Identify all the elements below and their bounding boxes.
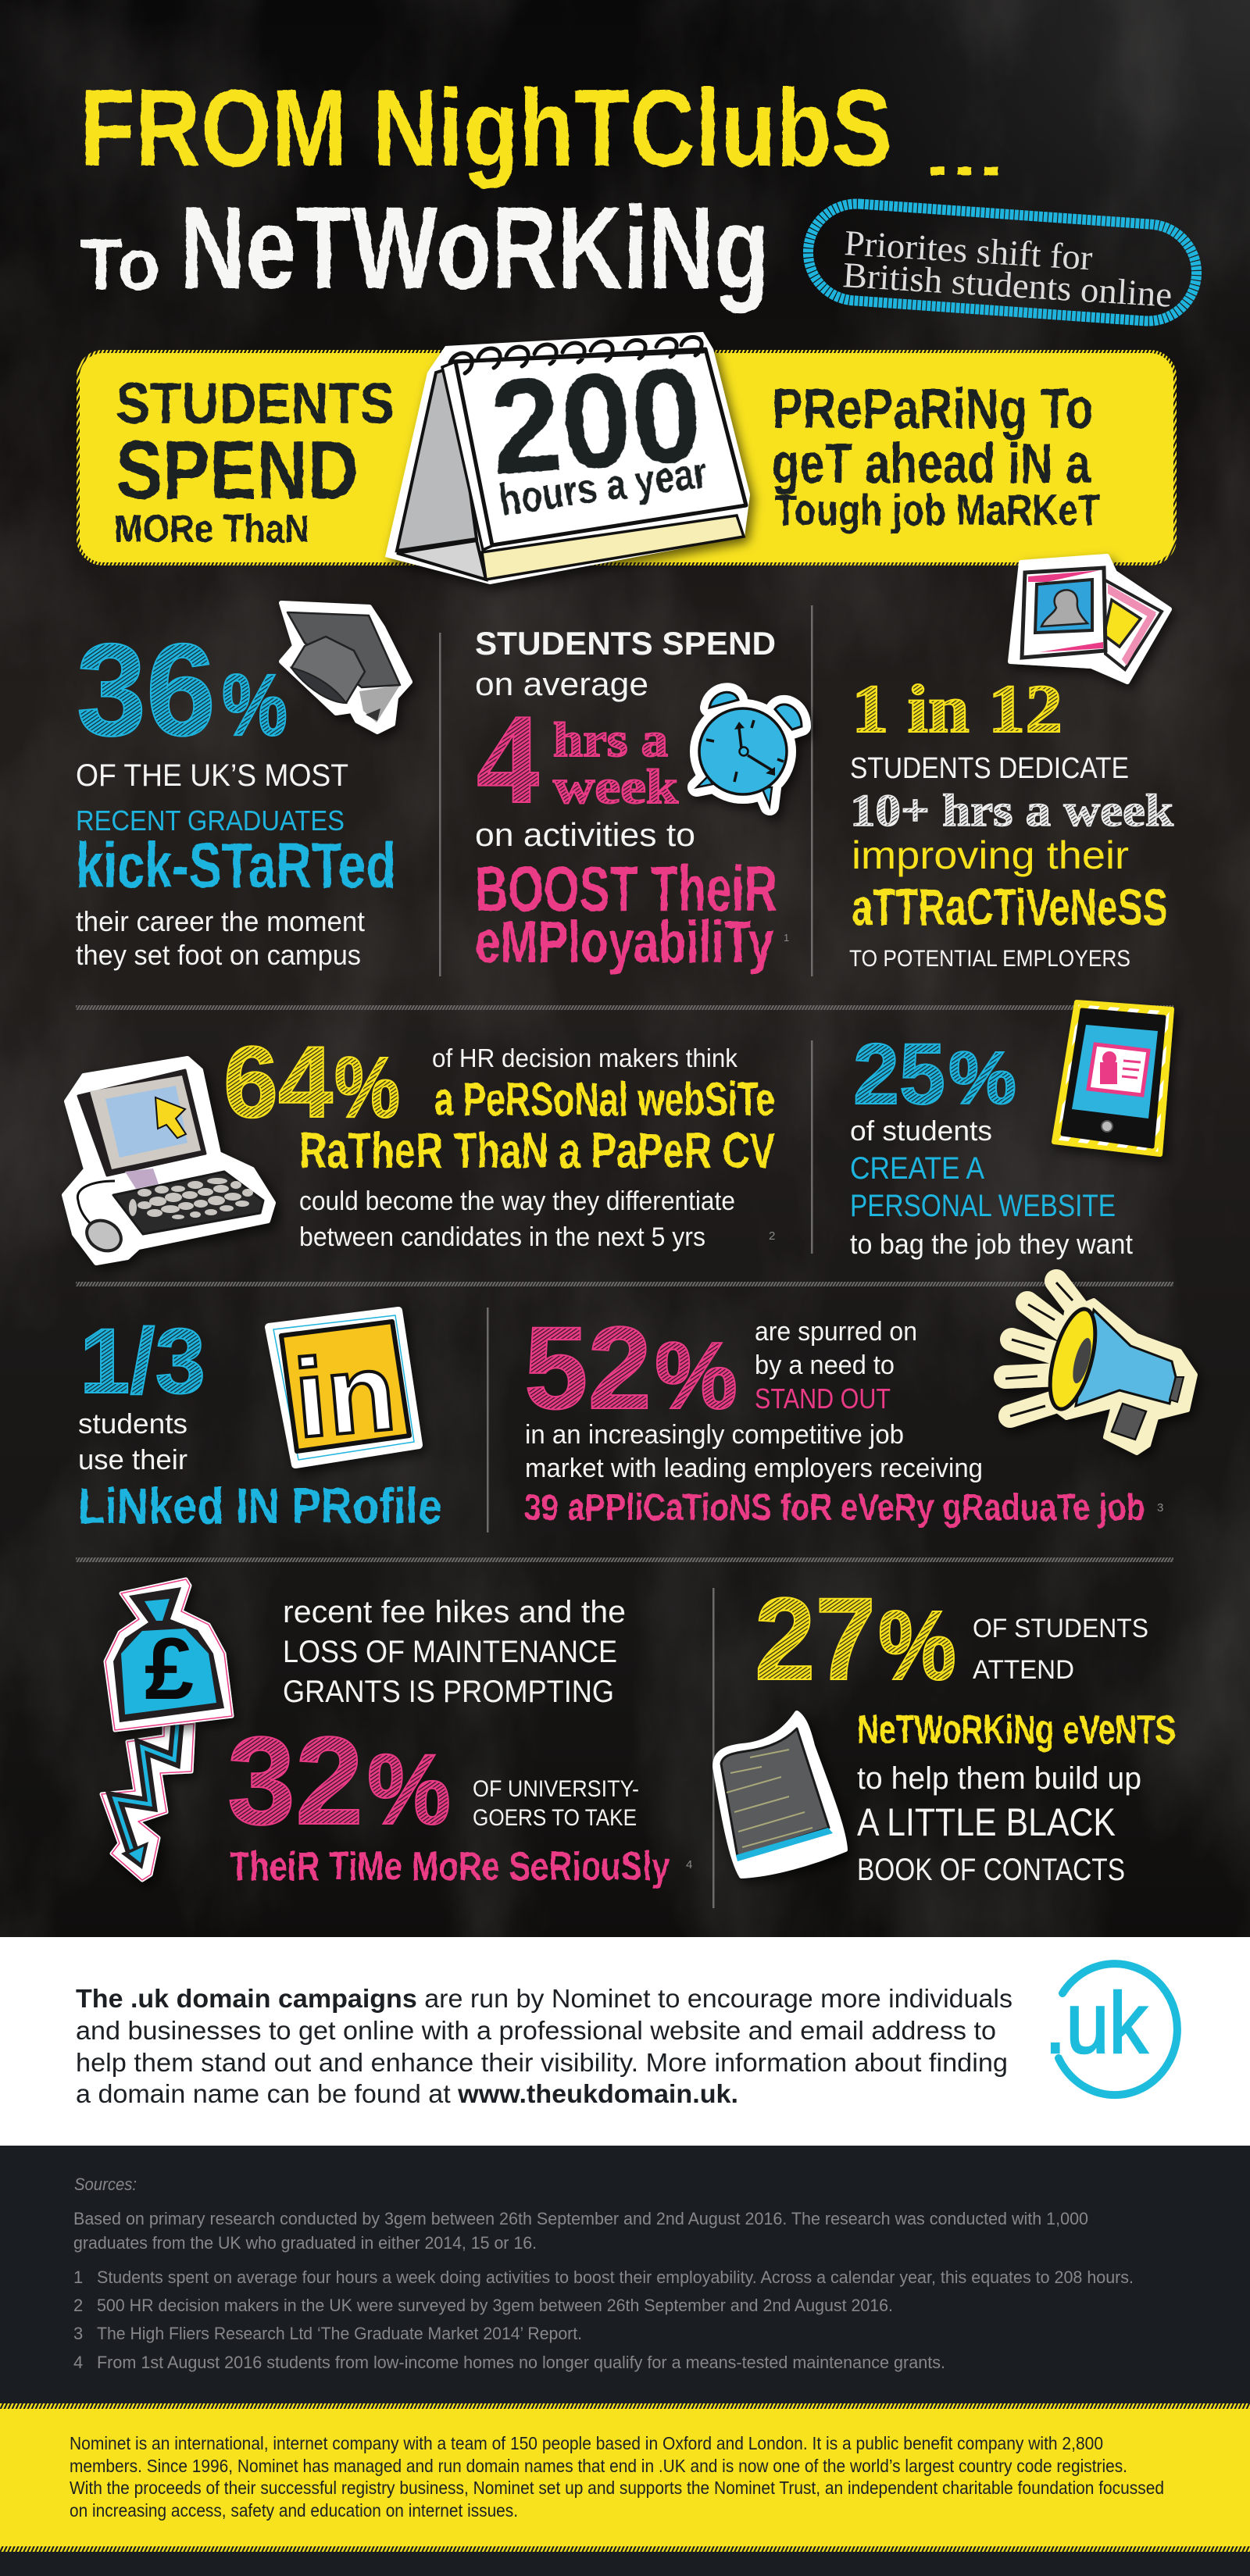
stat: 52 percent: 52	[524, 1302, 652, 1433]
chalkboard background	[0, 0, 1250, 1939]
stat: 36 percent: %	[222, 656, 288, 754]
stat: 36 percent: their career the moment	[76, 905, 365, 937]
title: ...	[924, 126, 1005, 187]
stat: 4 hrs a week: eMPloyabiliTy	[475, 909, 773, 976]
stat: 64 percent: could become the way they differentiate	[299, 1186, 735, 1216]
stat: 32 percent fee hikes: recent fee hikes and the	[283, 1595, 626, 1629]
icon: linkedin badge: in	[290, 1329, 400, 1461]
callout: priorities shift	[805, 201, 1200, 324]
stat: 4 hrs a week: hrs a	[553, 714, 668, 767]
panel: students spend 200 hours: MORe ThaN	[114, 507, 309, 551]
stat: 1 in 12	[849, 672, 1174, 972]
panel: sources: graduates from the UK who graduated in either 2014, 15 or 16.	[73, 2233, 537, 2253]
stat: 4 hrs a week: 1	[784, 932, 789, 944]
stat: 32 percent fee hikes: 4	[686, 1858, 692, 1871]
panel: .uk domain campaign: and businesses to get online with a professional website and email address to	[76, 2016, 996, 2045]
callout: priorities shift: Priorites shift for	[843, 223, 1094, 277]
stat: 64 percent: 64	[223, 1025, 333, 1139]
panel: sources: 3	[73, 2324, 83, 2343]
stat: one third	[78, 1310, 442, 1534]
stat: 4 hrs a week: STUDENTS SPEND	[475, 625, 776, 662]
stat: 52 percent	[524, 1302, 1163, 1529]
stat: 4 hrs a week: 4	[477, 687, 541, 830]
stat: 25 percent: %	[948, 1036, 1016, 1120]
icon: graduation cap	[281, 603, 410, 732]
panel: students spend 200 hours: SPEND	[116, 424, 359, 516]
stat: 36 percent: 36	[77, 616, 216, 763]
panel: .uk domain campaign: a domain name can be found at www.theukdomain.uk.	[76, 2079, 738, 2108]
icon: smartphone	[1054, 1002, 1172, 1154]
stat: 32 percent fee hikes: GOERS TO TAKE	[473, 1805, 637, 1831]
stat: 1 in 12: 10+ hrs a week	[850, 785, 1174, 836]
icon: megaphone	[1005, 1281, 1195, 1453]
stat: 36 percent: kick-STaRTed	[76, 830, 396, 901]
stat: 52 percent: are spurred on	[755, 1317, 917, 1347]
stat: 64 percent: of HR decision makers think	[432, 1044, 738, 1072]
stat: 4 hrs a week: on activities to	[475, 816, 695, 853]
stat: 27 percent	[755, 1573, 1176, 1887]
stat: 27 percent: %	[878, 1590, 956, 1700]
icon: desk calendar: hours a year	[496, 447, 710, 525]
stat: 36 percent: RECENT GRADUATES	[76, 805, 345, 837]
panel: students spend 200 hours: geT ahead iN a	[772, 433, 1091, 495]
stat: 1 in 12: STUDENTS DEDICATE	[850, 752, 1129, 785]
stat: 32 percent fee hikes: %	[367, 1734, 451, 1846]
panel: about nominet: Nominet is an international, internet company with a team of 150 people based in Oxford and London. It is a public benefit company with 2,800	[70, 2433, 1103, 2453]
stat: 64 percent: 2	[769, 1229, 775, 1243]
stat: 1 in 12: TO POTENTIAL EMPLOYERS	[849, 946, 1130, 972]
panel: sources: 500 HR decision makers in the UK were surveyed by 3gem between 26th September and 2nd August 2016.	[97, 2296, 893, 2315]
stat: 64 percent: RaTheR ThaN a PaPeR CV	[299, 1122, 775, 1179]
stat: one third: students	[78, 1408, 188, 1440]
stat: 25 percent: to bag the job they want	[850, 1228, 1133, 1260]
icon: linkedin badge	[269, 1311, 419, 1465]
panel: about nominet: members. Since 1996, Nominet has managed and run domain names that end in .UK and is now one of the world’s largest country code registries.	[70, 2456, 1127, 2476]
panel: about nominet	[0, 2403, 1250, 2552]
stat: 27 percent: A LITTLE BLACK	[857, 1800, 1116, 1844]
stat: 64 percent: a PeRSoNal webSiTe	[434, 1073, 775, 1126]
icon: photos	[1010, 556, 1170, 682]
panel: .uk domain campaign: help them stand out and enhance their visibility. More information about finding	[76, 2048, 1008, 2077]
stat: 4 hrs a week	[475, 625, 789, 976]
stat: 27 percent: BOOK OF CONTACTS	[857, 1853, 1125, 1887]
stat: 64 percent: %	[334, 1040, 400, 1136]
title: FROM NighTClubS	[80, 66, 892, 189]
stat: 32 percent fee hikes: LOSS OF MAINTENANCE	[283, 1635, 617, 1669]
logo: .uk	[1045, 1964, 1177, 2095]
stat: 36 percent: OF THE UK’S MOST	[76, 758, 348, 793]
stat: 52 percent: market with leading employers receiving	[525, 1454, 983, 1483]
title	[80, 66, 1005, 313]
stat: 25 percent: of students	[850, 1115, 992, 1147]
icon: money bag with falling arrow: £	[145, 1620, 194, 1718]
stat: 1 in 12: improving their	[852, 833, 1129, 877]
stat: 25 percent: 25	[853, 1026, 945, 1122]
stat: 32 percent fee hikes: OF UNIVERSITY-	[473, 1776, 639, 1802]
stat: one third: 1/3	[80, 1310, 205, 1413]
stat: 25 percent: PERSONAL WEBSITE	[850, 1189, 1116, 1223]
stat: 4 hrs a week: week	[553, 761, 679, 814]
panel: students spend 200 hours: STUDENTS	[116, 371, 395, 436]
stat: 64 percent	[223, 1025, 775, 1252]
stat: 4 hrs a week: BOOST TheiR	[475, 854, 777, 925]
icon: computer	[64, 1058, 273, 1263]
stat: 27 percent: OF STUDENTS	[973, 1614, 1148, 1643]
icon: desk calendar	[385, 332, 750, 584]
title: To	[80, 225, 160, 305]
stat: 36 percent	[76, 616, 396, 971]
stat: one third: LiNked IN PRofile	[78, 1478, 442, 1534]
stat: 25 percent: CREATE A	[850, 1151, 984, 1186]
icon: desk calendar: 200	[486, 339, 706, 503]
panel: sources: Based on primary research conducted by 3gem between 26th September and 2nd August 2016. The research was conducted with 1,000	[73, 2209, 1088, 2228]
stat: 32 percent fee hikes	[227, 1595, 692, 1889]
stat: 36 percent: they set foot on campus	[76, 939, 361, 971]
stat: one third: use their	[78, 1443, 188, 1475]
stat: 32 percent fee hikes: 32	[227, 1711, 363, 1850]
panel: sources: 4	[73, 2353, 83, 2372]
panel: students spend 200 hours: Tough job MaRKeT	[775, 485, 1100, 534]
icon: alarm clock	[697, 692, 802, 806]
icon: money bag with falling arrow	[102, 1579, 232, 1880]
panel: about nominet: on increasing access, safety and education on internet issues.	[70, 2500, 518, 2521]
logo: .uk: .uk	[1045, 1975, 1148, 2071]
stat: 4 hrs a week: on average	[475, 665, 648, 702]
stat: 32 percent fee hikes: GRANTS IS PROMPTING	[283, 1675, 614, 1709]
panel: sources	[0, 2146, 1250, 2576]
stat: 25 percent	[850, 1026, 1133, 1260]
stat: 27 percent: 27	[755, 1573, 876, 1704]
panel: sources: The High Fliers Research Ltd ‘The Graduate Market 2014’ Report.	[97, 2324, 582, 2343]
callout: priorities shift: British students online	[841, 255, 1173, 315]
stat: 64 percent: between candidates in the next 5 yrs	[299, 1222, 705, 1252]
panel: sources: From 1st August 2016 students from low-income homes no longer qualify for a means-tested maintenance grants.	[97, 2353, 945, 2372]
panel: about nominet: With the proceeds of their successful registry business, Nominet set up and supports the Nominet Trust, an independent charitable foundation focussed	[70, 2478, 1164, 2498]
panel: sources: 1	[73, 2267, 83, 2287]
stat: 1 in 12: 1 in 12	[852, 672, 1062, 747]
stat: 52 percent: in an increasingly competitive job	[525, 1420, 904, 1450]
panel: sources: 2	[73, 2296, 83, 2315]
stat: 27 percent: to help them build up	[857, 1761, 1141, 1796]
panel: students spend 200 hours	[80, 353, 1173, 562]
title: NeTWoRKiNg	[180, 182, 770, 313]
panel: students spend 200 hours: PRePaRiNg To	[772, 378, 1094, 441]
panel: .uk domain campaign: The .uk domain campaigns are run by Nominet to encourage more individuals	[76, 1984, 1012, 2013]
icon: black book	[715, 1713, 845, 1876]
stat: 52 percent: %	[655, 1322, 738, 1429]
panel: sources: Sources:	[74, 2175, 137, 2194]
stat: 52 percent: 3	[1157, 1501, 1163, 1515]
divider lines	[76, 605, 1173, 1908]
stat: 27 percent: ATTEND	[973, 1655, 1074, 1685]
panel: sources: Students spent on average four hours a week doing activities to boost their employability. Across a calendar year, this equates to 208 hours.	[97, 2267, 1134, 2287]
panel: .uk domain campaign	[0, 1937, 1250, 2146]
stat: 52 percent: STAND OUT	[755, 1383, 891, 1415]
stat: 52 percent: by a need to	[755, 1350, 895, 1380]
stat: 32 percent fee hikes: TheiR TiMe MoRe SeRiouSly	[230, 1844, 670, 1889]
